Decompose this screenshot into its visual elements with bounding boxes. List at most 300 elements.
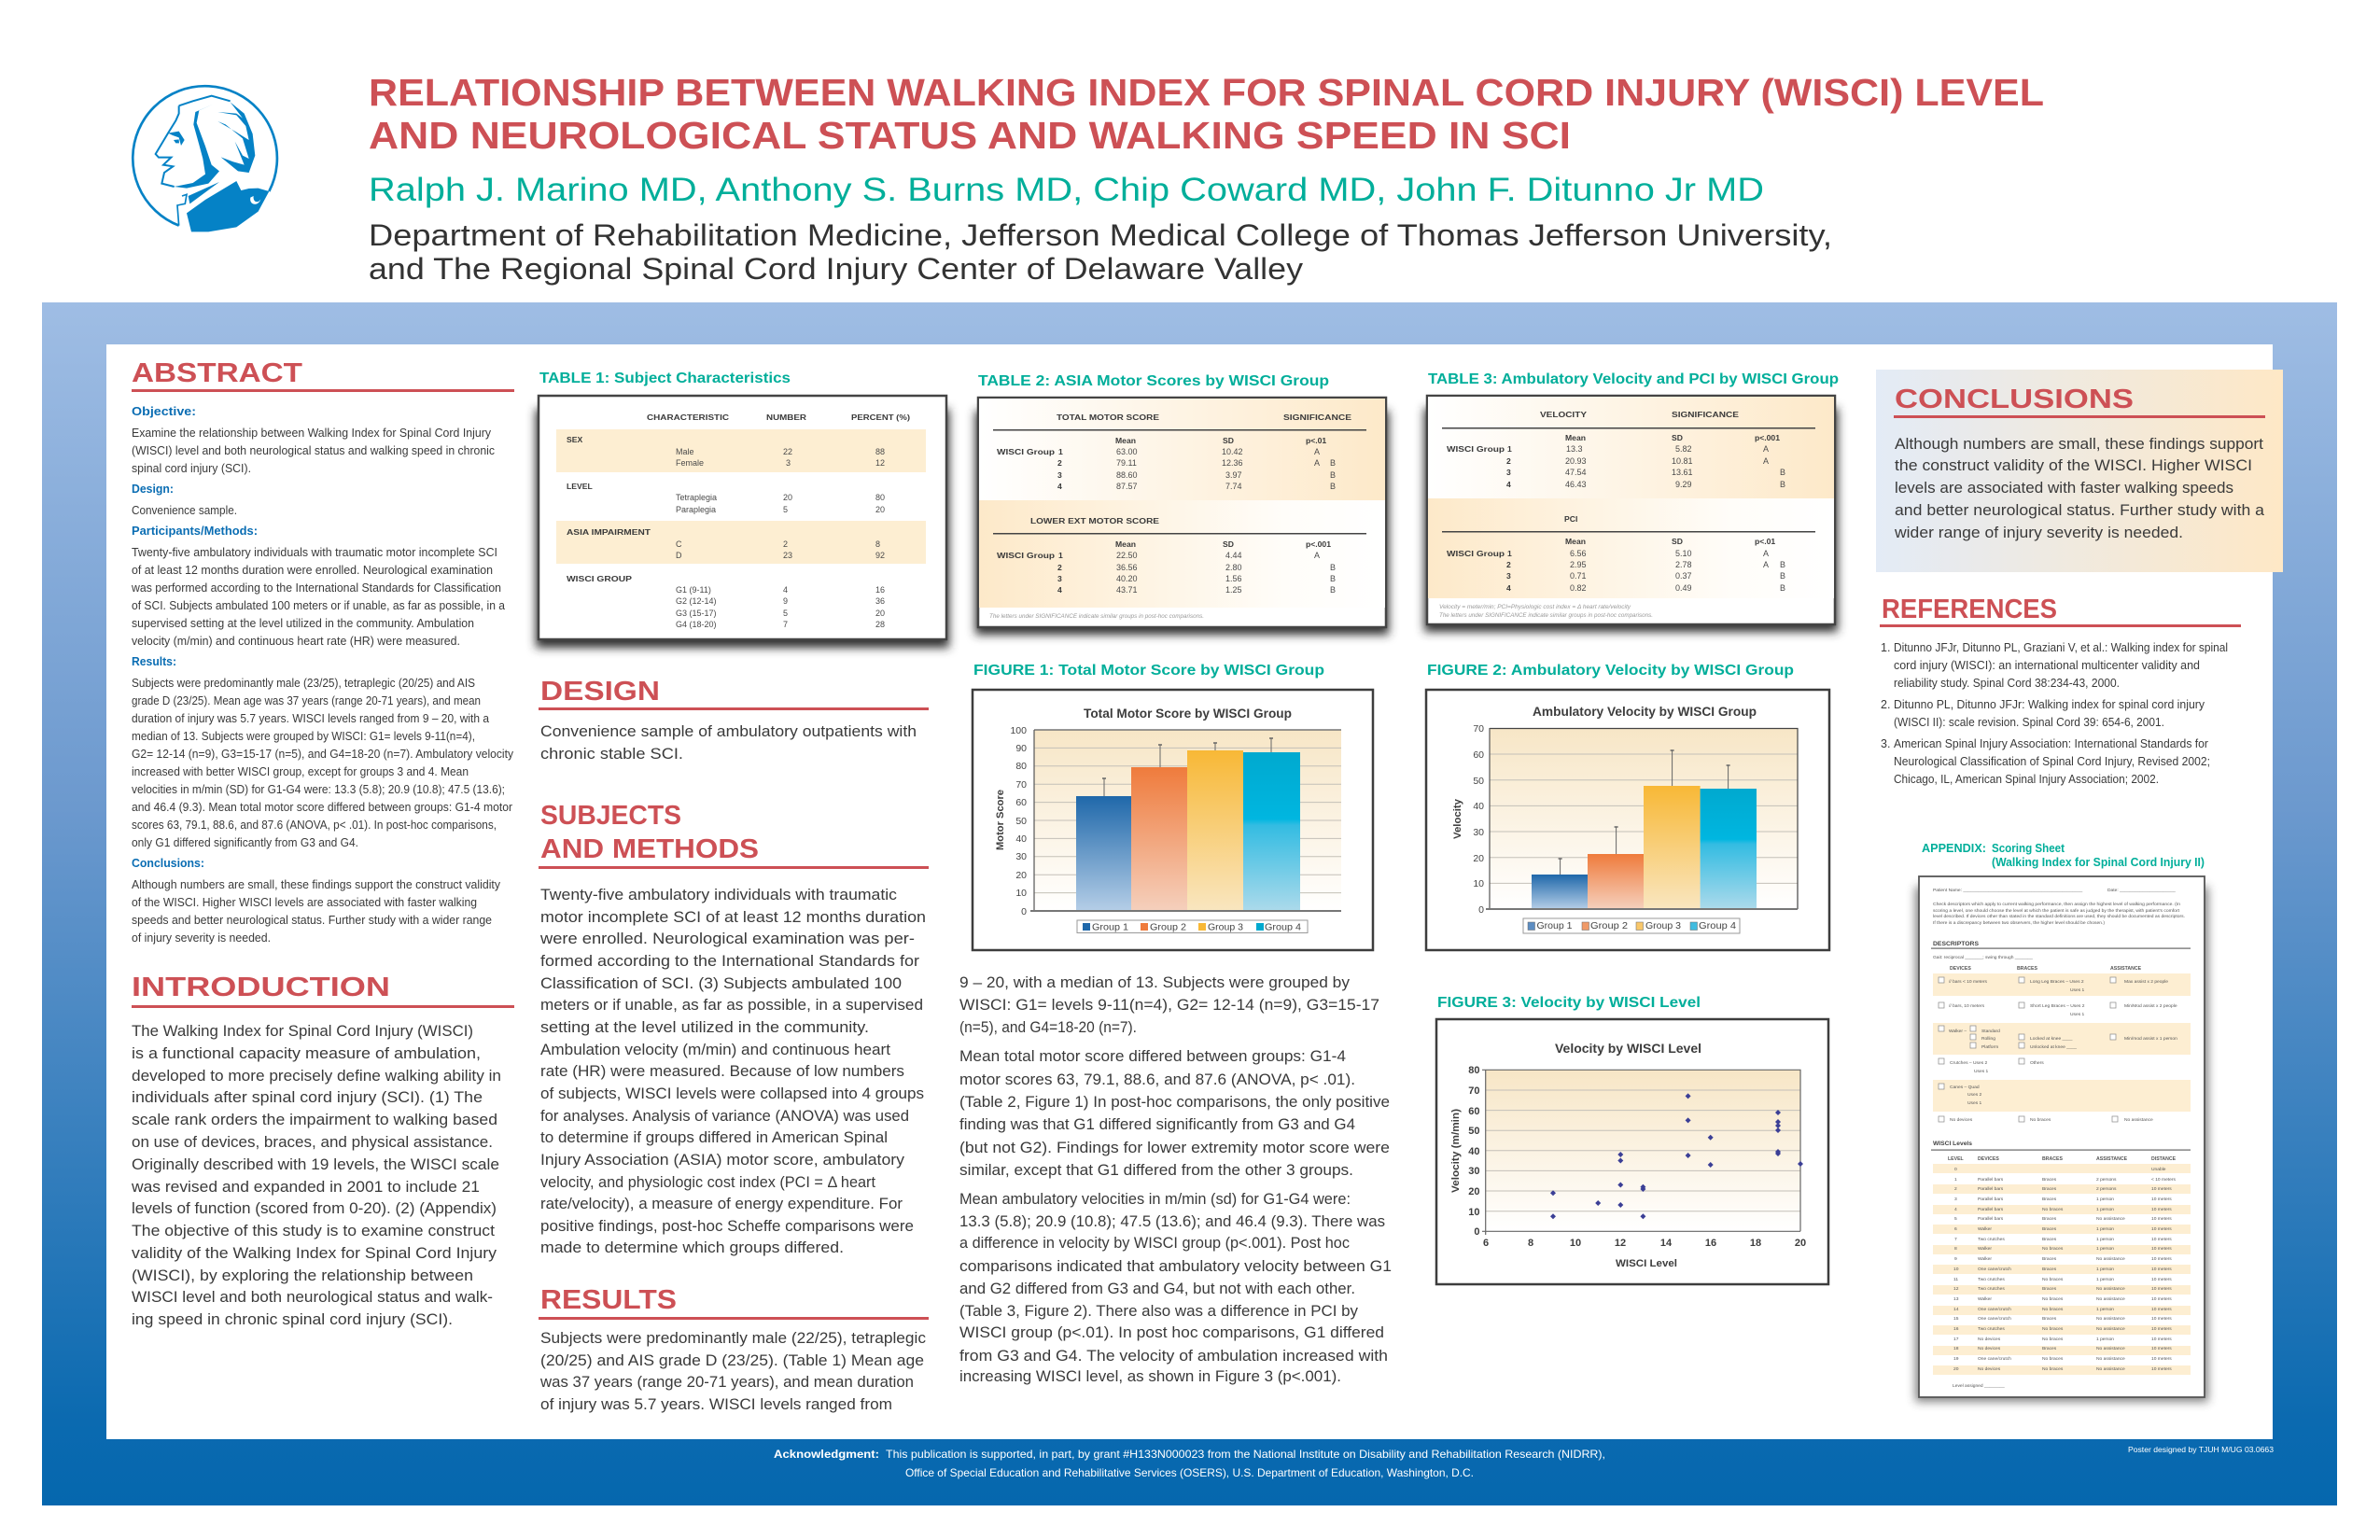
table 1 text: 4 [783,585,788,595]
abstract text: only G1 differed significantly from G3 and G4. [132,836,358,849]
subjects and methods text: Injury Association (ASIA) motor score, ambulatory [540,1152,905,1169]
table 1 text: G2 (12-14) [676,596,717,606]
WISCI levels table: 1 person [2096,1207,2114,1212]
table 3 text: Mean [1565,433,1586,442]
table 2 text: 4.44 [1225,551,1242,560]
WISCI levels table: No assistance [2096,1326,2125,1332]
table 3 text: SD [1672,433,1683,442]
bars [1532,750,1757,909]
x axis labels: 12 [1615,1238,1626,1249]
abstract text: Subjects were predominantly male (23/25), tetraplegic (20/25) and AIS [132,677,475,690]
abstract text: was performed according to the International Standards for Classification [131,581,501,595]
introduction text: individuals after spinal cord injury (SCI). (1) The [132,1089,483,1106]
table 1 text: WISCI GROUP [567,574,632,583]
references list: Ditunno PL, Ditunno JFJr: Walking index for spinal cord injury [1894,698,2205,711]
panel: table 3 [1424,371,1839,632]
heading: table 3: TABLE 3: Ambulatory Velocity and PCI by WISCI Group [1428,371,1839,387]
WISCI levels table: No braces [2042,1366,2064,1372]
y axis labels: 0 [1478,904,1484,916]
title [369,71,2044,157]
y axis labels: 10 [1468,1207,1480,1218]
WISCI levels table: 0 [1954,1167,1957,1172]
results text continued: 9 – 20, with a median of 13. Subjects were grouped by [959,974,1351,991]
table 3 text: 5.82 [1675,444,1692,454]
y axis labels: 30 [1468,1166,1480,1177]
x axis labels: 14 [1660,1238,1673,1249]
WISCI levels table: No braces [2042,1296,2064,1302]
WISCI levels table: No assistance [2096,1296,2125,1302]
introduction text: The Walking Index for Spinal Cord Injury (WISCI) [132,1023,473,1040]
introduction text: WISCI level and both neurological status and walk- [132,1289,493,1306]
panel: table 1 [536,371,949,648]
abstract text: Participants/Methods: [132,525,258,538]
bars [1076,738,1300,911]
abstract text: speeds and better neurological status. Further study with a wider range [132,914,492,927]
references list: 3. [1881,737,1890,750]
results text continued: comparisons indicated that ambulatory velocity between G1 [959,1258,1392,1275]
references list: American Spinal Injury Association: International Standards for [1894,737,2208,750]
conclusions text [1894,436,2265,541]
table 3 text: 2.95 [1570,560,1587,569]
subjects and methods text: meters or if unable, as far as possible, in a supervised [540,997,923,1014]
table 3 text: 0.82 [1570,583,1587,593]
abstract text: scores 63, 79.1, 88.6, and 87.6 (ANOVA, p< .01). In post-hoc comparisons, [132,819,497,832]
WISCI levels table: 10 meters [2151,1326,2172,1332]
WISCI levels table: < 10 meters [2151,1177,2177,1183]
legend: Group 1 [1092,922,1128,933]
table 2 text: 22.50 [1116,551,1138,560]
panel: introduction [131,973,514,1328]
results text: (20/25) and AIS grade D (23/25). (Table 1) Mean age [540,1352,924,1369]
y axis labels: 20 [1473,853,1484,864]
WISCI levels table: No assistance [2096,1366,2125,1372]
WISCI levels table: 10 meters [2151,1346,2172,1351]
table 3 text: 2 [1506,560,1511,569]
footer: acknowledgment: Acknowledgment: [774,1448,879,1461]
table 3 text: 13.61 [1672,468,1693,477]
design text: chronic stable SCI. [540,746,683,763]
results text continued: (n=5), and G4=18-20 (n=7). [959,1019,1137,1036]
table 3 text: WISCI Group [1447,444,1505,454]
table 2 text: Mean [1115,436,1136,445]
table 2 text: Mean [1115,539,1136,549]
heading: appendix: APPENDIX: [1922,841,1986,855]
table 3 text: 9.29 [1675,480,1692,489]
WISCI levels table: 8 [1954,1246,1957,1252]
subjects and methods text: formed according to the International Standards for [540,953,920,970]
results text continued: 13.3 (5.8); 20.9 (10.8); 47.5 (13.6); and 46.4 (9.3). There was [959,1213,1385,1230]
table 2 text: 79.11 [1116,458,1137,468]
table 1 text: NUMBER [766,413,807,422]
table 1 text: PERCENT (%) [851,413,910,422]
WISCI levels table: Two crutches [1978,1286,2005,1292]
WISCI levels table: 18 [1953,1346,1959,1351]
table 3 text: VELOCITY [1540,410,1587,419]
table 3 text: PCI [1564,514,1577,524]
descriptors section: // bars < 10 meters [1949,979,1987,985]
WISCI levels table: Two crutches [1978,1326,2005,1332]
table 1 text: D [676,551,682,560]
WISCI levels table: One cane/crutch [1978,1307,2011,1312]
table 2 text: 88.60 [1116,470,1138,480]
WISCI levels table: No assistance [2096,1356,2125,1362]
y axis labels: 20 [1015,870,1027,881]
introduction text [131,1023,501,1328]
references list: Chicago, IL, American Spinal Injury Association; 2002. [1894,773,2159,786]
table 3 text [1439,410,1785,619]
legend: Group 2 [1590,920,1628,931]
subjects and methods text: setting at the level utilized in the community. [540,1019,869,1036]
table 3 text: SD [1672,537,1683,546]
WISCI levels table: WISCI Levels [1933,1141,1972,1147]
descriptors section: No braces [2030,1117,2051,1123]
WISCI levels table: BRACES [2042,1156,2063,1162]
WISCI levels table: Braces [2042,1267,2057,1272]
results text continued: finding was that G1 differed significantly from G3 and G4 [959,1116,1355,1133]
WISCI levels table: Two crutches [1978,1237,2005,1242]
table 3 text: 4 [1506,583,1511,593]
form header: Date: ______________________ [2107,888,2176,893]
WISCI levels table: Unable [2151,1167,2166,1172]
results text continued: (Table 3, Figure 2). There also was a difference in PCI by [959,1303,1359,1320]
y axis labels: 40 [1468,1146,1480,1157]
WISCI levels table [1931,1141,2191,1389]
table 1 text: 16 [875,585,885,595]
introduction text: Originally described with 19 levels, the WISCI scale [132,1156,499,1173]
table 1 text: 36 [875,596,885,606]
table 1 text: 5 [783,609,788,618]
introduction text: The objective of this study is to examine construct [132,1223,495,1239]
table 2 text: 10.42 [1222,447,1243,456]
WISCI levels table: Braces [2042,1197,2057,1202]
panel: figure 1 bar chart [973,663,1373,950]
panel: references [1880,595,2241,786]
WISCI levels table: 16 [1953,1326,1959,1332]
WISCI levels table: No assistance [2096,1256,2125,1262]
WISCI levels table: No braces [2042,1207,2064,1212]
subjects and methods text: Classification of SCI. (3) Subjects ambulated 100 [540,975,902,992]
results text continued: Mean total motor score differed between groups: G1-4 [959,1048,1346,1065]
table 2 text: 2 [1057,563,1062,572]
abstract text: of at least 12 months duration were enrolled. Neurological examination [132,564,493,577]
descriptors section: Rolling [1981,1036,1995,1042]
WISCI levels table: Parallel bars [1978,1216,2004,1222]
y axis labels: 0 [1474,1226,1480,1238]
heading: subjects and methods: SUBJECTS [540,801,681,831]
conclusions text: levels are associated with faster walking speeds [1895,480,2233,497]
WISCI levels table: Parallel bars [1978,1207,2004,1212]
references list: Neurological Classification of Spinal Cord Injury, Revised 2002; [1894,755,2210,768]
table 3 text: 13.3 [1566,444,1583,454]
y axis labels: 50 [1015,816,1027,827]
WISCI levels table: LEVEL [1948,1156,1965,1162]
WISCI levels table: DISTANCE [2151,1156,2177,1162]
table 1 text: 9 [783,596,788,606]
WISCI levels table: No assistance [2096,1286,2125,1292]
legend: Group 4 [1265,922,1301,933]
WISCI levels table: Braces [2042,1346,2057,1351]
y axis labels [1468,1065,1480,1238]
results text continued: (but not G2). Findings for lower extremity motor score were [959,1140,1390,1156]
introduction text: developed to more precisely define walking ability in [132,1068,501,1085]
abstract text: (WISCI) level and both neurological status and walking speed in chronic [132,444,495,457]
WISCI levels table: 20 [1953,1366,1959,1372]
x axis labels [1483,1238,1806,1249]
y axis title: Velocity (m/min) [1450,1109,1462,1193]
descriptors section: Standard [1981,1029,2000,1034]
WISCI levels table: 10 meters [2151,1307,2172,1312]
WISCI levels table: 7 [1954,1237,1957,1242]
WISCI levels table: 1 person [2096,1246,2114,1252]
table 2 text: WISCI Group [997,447,1055,456]
data points [1550,1093,1803,1219]
heading: figure 2: FIGURE 2: Ambulatory Velocity by WISCI Group [1427,663,1794,679]
WISCI levels table: 1 person [2096,1307,2114,1312]
descriptors section: Locked at knee ____ [2030,1036,2073,1042]
WISCI levels table: Walker [1978,1246,1992,1252]
y axis labels [1010,725,1027,917]
table 2 text: 87.57 [1116,482,1138,491]
footer: acknowledgment: Office of Special Education and Rehabilitative Services (OSERS), U.S. Department of Education, Washington, D.C. [905,1466,1474,1479]
table 3 text: Velocity = meter/min; PCI=Physiologic cost index = Δ heart rate/velocity [1439,604,1631,610]
WISCI levels table: 5 [1954,1216,1957,1222]
table 2 text: p<.001 [1306,539,1331,549]
y axis title: Motor Score [995,790,1006,850]
subjects and methods text: to determine if groups differed in American Spinal [540,1129,888,1146]
table 3 text: 0.37 [1675,571,1692,581]
table 1 text: 92 [875,551,885,560]
table 2 text: 36.56 [1116,563,1138,572]
WISCI levels table: 13 [1953,1296,1959,1302]
abstract text: velocity (m/min) and continuous heart rate (HR) were measured. [132,635,460,648]
table 3 text: 6.56 [1570,549,1587,558]
abstract text: G2= 12-14 (n=9), G3=15-17 (n=5), and G4=18-20 (n=7). Ambulatory velocity [132,748,514,761]
WISCI levels table: No devices [1978,1346,2001,1351]
table 1 text: CHARACTERISTIC [647,413,729,422]
table 1 text: 12 [875,458,885,468]
table 2 text: B [1330,470,1336,480]
descriptors section: Max assist x 2 people [2124,979,2168,985]
affiliation [369,218,1832,286]
descriptors section: // bars, 10 meters [1949,1003,1985,1009]
y axis labels: 60 [1015,797,1027,808]
WISCI levels table: No devices [1978,1337,2001,1342]
table 2 text: A [1314,551,1320,560]
references list: 1. [1881,641,1890,654]
abstract text: Design: [132,483,174,496]
table 2 text: 1 [1058,447,1063,456]
WISCI levels table: 3 [1954,1197,1957,1202]
y axis labels [1473,723,1484,916]
table 2 text: 2.80 [1225,563,1242,572]
table 1 text: ASIA IMPAIRMENT [567,527,651,537]
descriptors section: Uses 2 [1967,1092,1982,1098]
y axis labels: 30 [1473,827,1484,838]
table 1 text: Male [676,447,694,456]
results text [539,1330,926,1413]
table 2 text: 12.36 [1222,458,1243,468]
table 3 text: B [1780,571,1785,581]
WISCI levels table: 1 person [2096,1277,2114,1282]
y axis labels: 50 [1468,1126,1480,1137]
heading: appendix [1922,841,2205,869]
x axis labels: 18 [1750,1238,1761,1249]
WISCI levels table: Parallel bars [1978,1177,2004,1183]
WISCI levels table: 6 [1954,1226,1957,1232]
WISCI levels table: Braces [2042,1177,2057,1183]
table 2 text: TOTAL MOTOR SCORE [1057,413,1159,422]
footer: acknowledgment: This publication is supported, in part, by grant #H133N000023 from the National Institute on Disability and Rehabilitation Research (NIDRR), [886,1448,1605,1461]
WISCI levels table: No assistance [2096,1316,2125,1322]
panel: figure 3 scatter plot [1436,995,1828,1284]
heading: design: DESIGN [540,677,660,707]
descriptors section: Uses 1 [1974,1069,1989,1074]
table 2 text: 4 [1057,585,1062,595]
introduction text: ing speed in chronic spinal cord injury (SCI). [132,1311,453,1328]
WISCI levels table: 10 meters [2151,1316,2172,1322]
abstract text: Conclusions: [132,857,204,870]
table 1 text: 5 [783,505,788,514]
descriptors section: Others [2030,1060,2044,1066]
WISCI levels table: 4 [1954,1207,1957,1212]
table 1 text: 2 [783,539,788,549]
WISCI levels table: 19 [1953,1356,1959,1362]
y axis labels: 40 [1473,801,1484,812]
conclusions text: wider range of injury severity is needed. [1894,525,2183,541]
results text continued: WISCI: G1= levels 9-11(n=4), G2= 12-14 (n=9), G3=15-17 [959,997,1379,1014]
WISCI levels table: 10 [1953,1267,1959,1272]
abstract text: of injury severity is needed. [132,931,271,945]
subjects and methods text: made to determine which groups differed. [540,1239,844,1256]
results text continued: increasing WISCI level, as shown in Figure 3 (p<.001). [959,1368,1341,1385]
x axis labels: 20 [1795,1238,1806,1249]
table 2 text [989,413,1351,620]
y axis labels: 10 [1015,888,1027,899]
legend [1077,920,1308,933]
WISCI levels table: Braces [2042,1256,2057,1262]
table 1 text: 3 [786,458,791,468]
WISCI levels table: No assistance [2096,1216,2125,1222]
table 2 text: 40.20 [1116,574,1138,583]
table 2 text: B [1330,458,1336,468]
results text continued: motor scores 63, 79.1, 88.6, and 87.6 (ANOVA, p< .01). [959,1071,1355,1088]
x axis labels: 16 [1705,1238,1716,1249]
heading: figure 1: FIGURE 1: Total Motor Score by WISCI Group [973,663,1324,679]
heading: appendix: Scoring Sheet [1992,841,2065,855]
WISCI levels table: Braces [2042,1316,2057,1322]
table 3 text: A [1763,456,1769,466]
WISCI levels table: 10 meters [2151,1337,2172,1342]
subjects and methods text [539,887,926,1256]
WISCI levels table: Walker [1978,1226,1992,1232]
WISCI levels table: One cane/crutch [1978,1316,2011,1322]
descriptors section: Uses 1 [1967,1100,1982,1106]
WISCI levels table: 11 [1953,1277,1958,1282]
table 2 text: 2 [1057,458,1062,468]
references list [1881,641,2228,786]
introduction text: was revised and expanded in 2001 to include 21 [131,1179,480,1196]
authors: Ralph J. Marino MD, Anthony S. Burns MD, Chip Coward MD, John F. Ditunno Jr MD [369,172,1764,208]
table 1 text: 20 [875,609,885,618]
results text: Subjects were predominantly male (22/25), tetraplegic [540,1330,926,1347]
affiliation: Department of Rehabilitation Medicine, Jefferson Medical College of Thomas Jefferson University, [369,218,1832,252]
table 2 text: 3 [1057,574,1062,583]
WISCI levels table: 10 meters [2151,1256,2172,1262]
table 2 text: 1.25 [1225,585,1242,595]
table 1 text: 20 [875,505,885,514]
descriptors section: No assistance [2124,1117,2153,1123]
y axis labels: 70 [1468,1085,1480,1097]
table 3 text: WISCI Group [1447,549,1505,558]
table 2 text: SD [1223,539,1234,549]
WISCI levels table: 10 meters [2151,1296,2172,1302]
table 2 text: A [1314,458,1320,468]
descriptors section: DEVICES [1950,966,1971,972]
abstract text: and 46.4 (9.3). Mean total motor score differed between groups: G1-4 motor [132,801,512,814]
WISCI levels table: 1 person [2096,1226,2114,1232]
form header: level described. If devices other than stated in the standard definitions are used, they should be documented as descriptors. [1933,914,2185,919]
abstract text: supervised setting at the level utilized in the community. Ambulation [132,617,474,630]
heading: results: RESULTS [540,1285,677,1315]
introduction text: on use of devices, braces, and physical assistance. [132,1134,493,1151]
table 2 text: 3.97 [1225,470,1242,480]
results text continued: a difference in velocity by WISCI group (p<.001). Post hoc [959,1235,1350,1252]
descriptors section: No devices [1950,1117,1973,1123]
WISCI levels table: 10 meters [2151,1186,2172,1192]
y axis labels: 80 [1015,761,1027,772]
WISCI levels table: No braces [2042,1307,2064,1312]
references list: cord injury (WISCI): an international multicenter validity and [1894,659,2200,672]
panel: design [539,677,929,763]
y axis labels: 20 [1468,1186,1480,1197]
table 3 text: 3 [1506,571,1511,581]
table 2 text: B [1330,574,1336,583]
abstract text: increased with better WISCI group, except for groups 3 and 4. Mean [132,765,469,778]
results text continued: (Table 2, Figure 1) In post-hoc comparisons, the only positive [959,1094,1390,1111]
table 1 text: G3 (15-17) [676,609,717,618]
WISCI levels table: 10 meters [2151,1267,2172,1272]
table 3 text: 46.43 [1565,480,1587,489]
abstract text: Examine the relationship between Walking Index for Spinal Cord Injury [132,427,492,440]
x axis labels: 10 [1570,1238,1581,1249]
table 2 text: 43.71 [1116,585,1138,595]
legend: Group 2 [1150,922,1186,933]
WISCI levels table: 1 person [2096,1197,2114,1202]
WISCI levels table: 1 person [2096,1237,2114,1242]
table 2 text: 1.56 [1225,574,1242,583]
WISCI levels table: No braces [2042,1356,2064,1362]
results text: was 37 years (range 20-71 years), and mean duration [539,1374,914,1391]
panel: appendix scoring sheet [1915,841,2208,1402]
WISCI levels table: Braces [2042,1237,2057,1242]
table 2 text: LOWER EXT MOTOR SCORE [1030,516,1159,525]
WISCI levels table: 15 [1953,1316,1959,1322]
logo: Thomas Jefferson medallion [133,86,277,231]
WISCI levels table: 12 [1953,1286,1959,1292]
x axis labels: 6 [1483,1238,1489,1249]
table 3 text: 3 [1506,468,1511,477]
WISCI levels table: Braces [2042,1226,2057,1232]
abstract text: Convenience sample. [132,504,237,517]
table 3 text: 0.71 [1570,571,1587,581]
WISCI levels table: 10 meters [2151,1277,2172,1282]
WISCI levels table: No devices [1978,1366,2001,1372]
abstract text: of SCI. Subjects ambulated 100 meters or if unable, as far as possible, in a [132,599,505,612]
table 3 text: 4 [1506,480,1511,489]
y axis labels: 60 [1468,1106,1480,1117]
table 3 text: 20.93 [1565,456,1587,466]
table 2 text: B [1330,585,1336,595]
